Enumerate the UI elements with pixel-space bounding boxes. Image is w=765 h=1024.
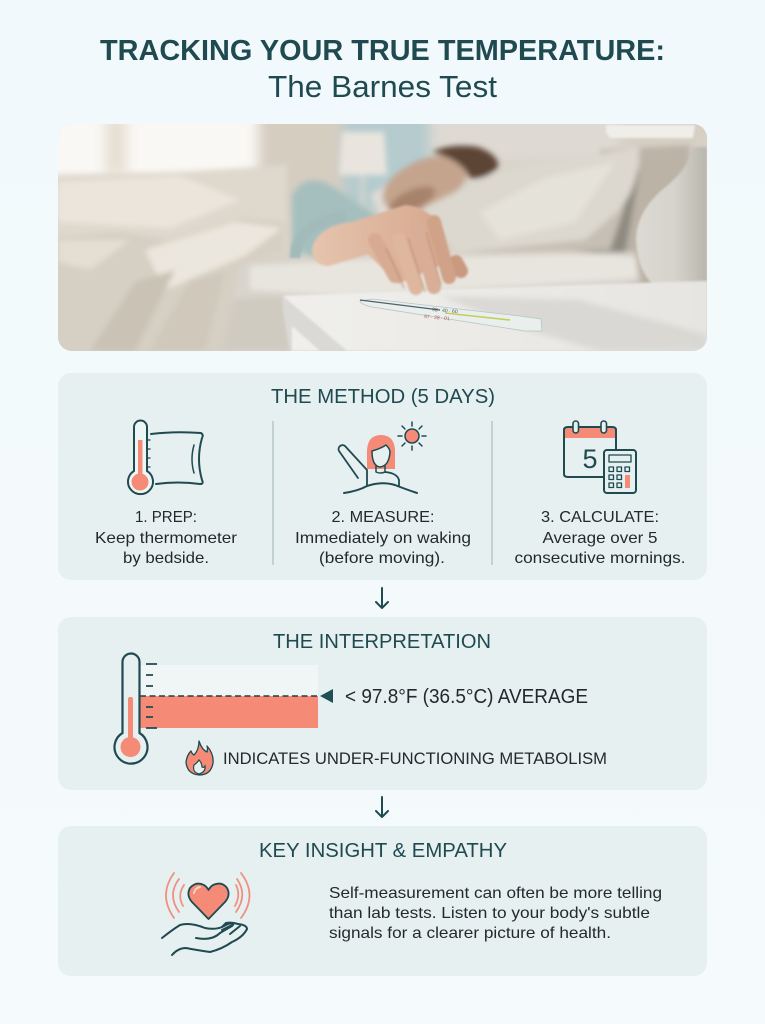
text: threshold: < 97.8°F (36.5°C) AVERAGE [345,686,588,708]
icon: flame [186,741,213,775]
pillow behind face [369,186,391,212]
mattress [589,248,642,285]
icon: woman waking with sun [339,422,426,493]
title: TRACKING YOUR TRUE TEMPERATURE: [100,35,665,67]
shirt [292,180,376,262]
icon: thermometer and pillow [128,420,203,494]
arrow: interpretation to insight [376,797,388,817]
front pillow [423,147,639,253]
text: step 1: 1. PREP: [135,509,197,526]
text: metabolism: INDICATES UNDER-FUNCTIONING METABOLISM [223,750,607,768]
text: step 2 [295,509,471,567]
table shadow [440,296,707,351]
text: insight [329,885,662,942]
table top [283,281,707,351]
panel: the method [58,373,707,580]
heading: key insight: KEY INSIGHT & EMPATHY [259,840,507,862]
icon: heart in hand with signal waves [162,873,250,955]
thermometer on table [360,299,542,331]
thermometer on table: 97 · 28 · 01 [424,314,450,322]
text: step 3 [514,509,686,567]
icon: calendar and calculator [564,421,636,493]
heading: the method: THE METHOD (5 DAYS) [271,386,495,408]
title: The Barnes Test [268,69,497,104]
text: step 2: (before moving). [319,550,445,567]
panel: key insight [58,826,707,976]
face [380,154,468,210]
hair [432,146,498,178]
text: step 1: Keep thermometer [95,530,238,547]
heading: the interpretation: THE INTERPRETATION [273,631,491,653]
icon: calendar and calculator: 5 [582,444,598,474]
title [100,35,665,104]
text: step 3: Average over 5 [542,530,658,547]
arm and hand [295,205,461,292]
dividers [273,421,492,565]
vase [636,147,707,298]
text: insight: signals for a clearer picture of health. [329,925,611,942]
arrow: method to interpretation [376,588,388,608]
lampshade [606,125,695,138]
text: step 1 [95,509,238,567]
chart: temperature threshold bar [140,664,333,728]
lamp [339,132,387,175]
thermometer on table: 98 · 40 · 60 [432,307,458,315]
duvet [58,166,286,215]
panel: the interpretation [58,617,707,790]
text: step 3: 3. CALCULATE: [541,509,659,526]
text: step 1: by bedside. [123,550,209,567]
text: step 3: consecutive mornings. [514,550,686,567]
text: step 2: Immediately on waking [295,530,471,547]
headboard [600,144,691,284]
text: insight: Self-measurement can often be more telling [329,885,662,902]
photo: woman in bed reaching for a thermometer on the bedside table [58,124,707,351]
icon: large thermometer [114,654,148,764]
text: step 2: 2. MEASURE: [332,509,434,526]
text: insight: than lab tests. Listen to your body's subtle [329,905,650,922]
